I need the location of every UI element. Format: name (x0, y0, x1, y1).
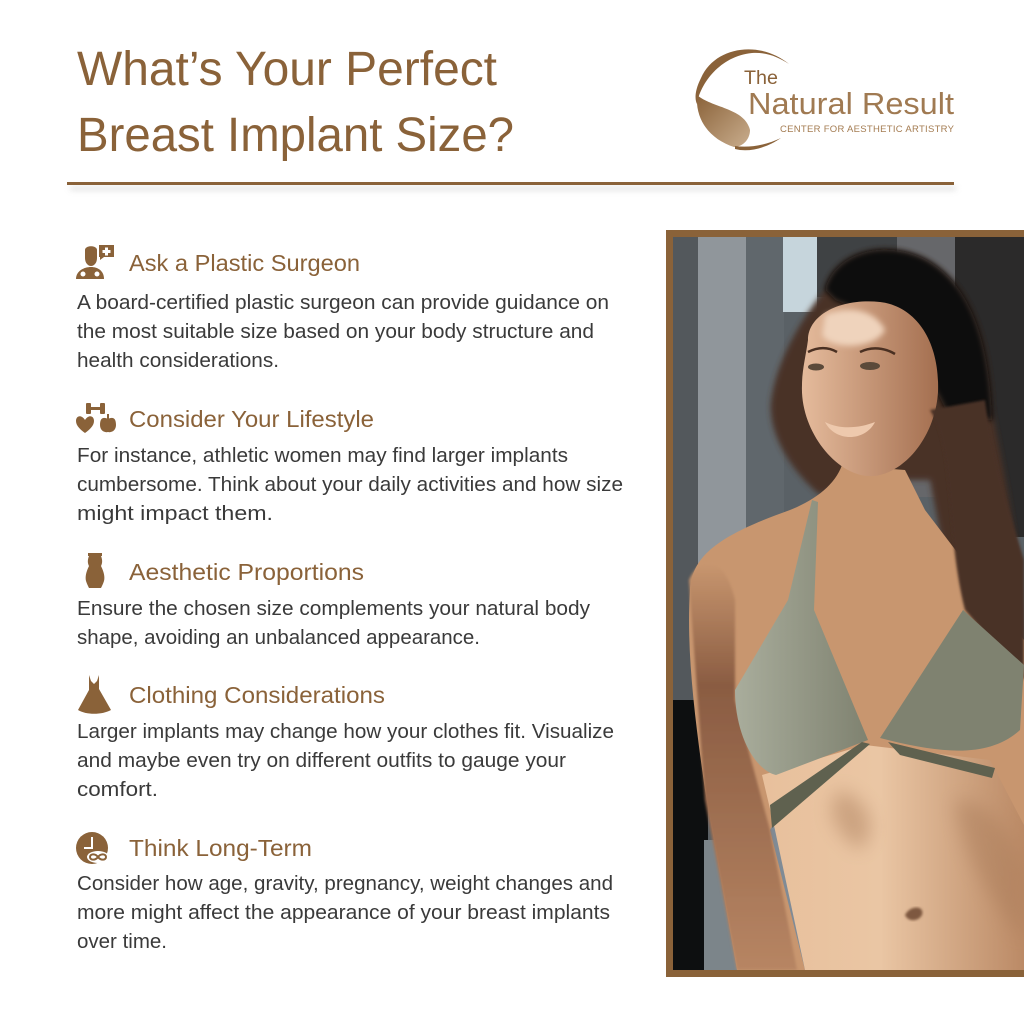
body text: more might affect the appearance of your breast implants (77, 901, 610, 924)
title (77, 43, 514, 162)
body text (77, 720, 614, 801)
title: What’s Your Perfect (77, 43, 497, 96)
figure: stylised hair, skin and garment blocks (689, 250, 1024, 970)
heading: Think Long-Term (129, 835, 312, 861)
body text: health considerations. (77, 349, 279, 372)
body text: the most suitable size based on your body structure and (77, 320, 594, 343)
section: Clothing Considerations (77, 675, 614, 801)
body text: over time. (77, 930, 167, 953)
logo: The Natural Result: The (744, 68, 778, 89)
photo panel: stylised portrait in brown frame (666, 230, 1024, 977)
body text: comfort. (77, 778, 158, 801)
body text (77, 444, 623, 525)
section: Think Long-Term (76, 832, 613, 953)
body text: Consider how age, gravity, pregnancy, weight changes and (77, 872, 613, 895)
title: Breast Implant Size? (77, 109, 514, 162)
body text: For instance, athletic women may find larger implants (77, 444, 568, 467)
section: Ask a Plastic Surgeon (76, 245, 609, 372)
section: Aesthetic Proportions (77, 553, 591, 649)
body text: A board-certified plastic surgeon can provide guidance on (77, 291, 609, 314)
body text (77, 872, 613, 953)
body text: cumbersome. Think about your daily activities and how size (77, 473, 623, 496)
icon: dumbbell, heart and apple (76, 403, 116, 433)
icon: surgeon with medical speech bubble (76, 245, 114, 279)
body text: Larger implants may change how your clothes fit. Visualize (77, 720, 614, 743)
body text (77, 291, 609, 372)
icon: torso silhouette (86, 553, 104, 588)
heading: Consider Your Lifestyle (129, 406, 374, 432)
icon: dress (78, 675, 111, 714)
heading: Clothing Considerations (129, 682, 385, 708)
logo: The Natural Result (696, 49, 955, 150)
heading: Aesthetic Proportions (129, 559, 364, 585)
body text: and maybe even try on different outfits to gauge your (77, 749, 566, 772)
section: Consider Your Lifestyle (76, 403, 623, 525)
heading: Ask a Plastic Surgeon (129, 250, 360, 276)
body text (77, 597, 591, 649)
photo background: window and curtains (673, 237, 1024, 970)
body text: Ensure the chosen size complements your natural body (77, 597, 591, 620)
body text: shape, avoiding an unbalanced appearance. (77, 626, 480, 649)
divider rule (67, 182, 956, 190)
logo: The Natural Result: CENTER FOR AESTHETIC ARTISTRY (780, 124, 955, 135)
icon: clock with infinity (76, 832, 109, 864)
body text: might impact them. (77, 502, 273, 525)
logo: The Natural Result: Natural Result (748, 86, 954, 121)
